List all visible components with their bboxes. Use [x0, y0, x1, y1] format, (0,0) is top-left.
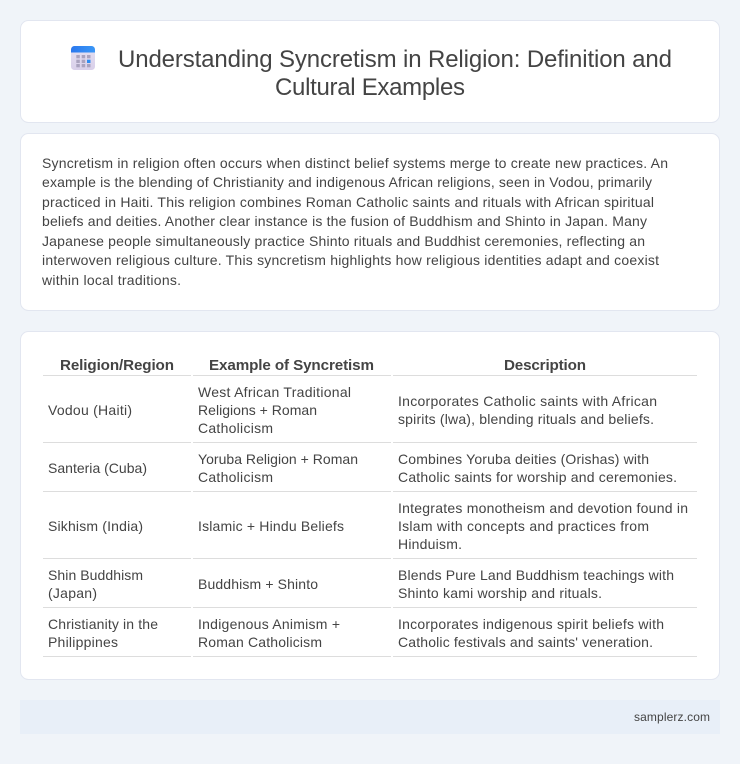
table header: [60, 357, 586, 374]
text block: syncretism overview: beliefs and deities. Another clear instance is the fusion of Buddhism and Shinto in Japan. Many: [42, 213, 647, 229]
row: Sikhism: Sikhism (India): [48, 518, 143, 534]
text block: syncretism overview: practiced in Haiti. This religion combines Roman Catholic saints and rituals with African spiritual: [42, 194, 654, 210]
row: Shin Buddhism: Shin Buddhism: [48, 567, 143, 583]
row: Vodou: Vodou (Haiti): [48, 402, 132, 418]
panel: introduction paragraph: [20, 134, 720, 310]
row: Vodou: West African Traditional: [198, 384, 351, 400]
text block: syncretism overview: example is the blending of Christianity and indigenous African religions, seen in Vodou, primarily: [42, 174, 652, 190]
panel: title card: [20, 20, 720, 122]
footer: samplerz.com: [634, 710, 710, 724]
row: Santeria: Catholicism: [198, 469, 273, 485]
row: Vodou: Religions + Roman: [198, 402, 317, 418]
title: Understanding Syncretism in Religion: Definition and: [118, 46, 672, 73]
row: Christianity in the Philippines: [43, 607, 697, 657]
row: Christianity in the Philippines: Incorporates indigenous spirit beliefs with: [398, 616, 664, 632]
table header: Religion/Region: [60, 357, 174, 374]
row: Sikhism: Integrates monotheism and devotion found in: [398, 500, 688, 516]
text block: syncretism overview: Japanese people simultaneously practice Shinto rituals and Buddhist ceremonies, reflecting an: [42, 233, 645, 249]
row: Christianity in the Philippines: Philippines: [48, 634, 118, 650]
row: Sikhism: Hinduism.: [398, 536, 462, 552]
row: Shin Buddhism: (Japan): [48, 585, 97, 601]
text block: syncretism overview: [41, 155, 668, 288]
row: Santeria: Combines Yoruba deities (Orishas) with: [398, 451, 649, 467]
footer: [20, 700, 720, 734]
table header: Example of Syncretism: [209, 357, 374, 374]
table header: Description: [504, 357, 586, 374]
row: Santeria: Yoruba Religion + Roman: [198, 451, 358, 467]
text block: syncretism overview: interwoven religious culture. This syncretism highlights how religious identities adapt and coexist: [42, 252, 659, 268]
title: Cultural Examples: [275, 74, 465, 101]
row: Shin Buddhism: [43, 558, 697, 601]
row: Christianity in the Philippines: Indigenous Animism +: [198, 616, 340, 632]
row: Santeria: Santeria (Cuba): [48, 460, 147, 476]
row: Christianity in the Philippines: Catholic festivals and saints' veneration.: [398, 634, 653, 650]
icon: calendar: [71, 46, 95, 70]
row: Vodou: spirits (lwa), blending rituals and beliefs.: [398, 411, 654, 427]
row: Shin Buddhism: Blends Pure Land Buddhism teachings with: [398, 567, 674, 583]
row: Sikhism: Islam with concepts and practices from: [398, 518, 649, 534]
text block: syncretism overview: within local traditions.: [41, 272, 181, 288]
row: Vodou: [43, 375, 697, 436]
panel: syncretism table: [20, 332, 720, 680]
row: Vodou: Catholicism: [198, 420, 273, 436]
row: Christianity in the Philippines: Christianity in the: [48, 616, 158, 632]
row: Sikhism: [43, 491, 697, 552]
row: Shin Buddhism: Buddhism + Shinto: [198, 576, 318, 592]
row: Santeria: [43, 442, 697, 485]
row: Sikhism: Islamic + Hindu Beliefs: [198, 518, 344, 534]
text block: syncretism overview: Syncretism in religion often occurs when distinct belief systems merge to create new practices. An: [42, 155, 668, 171]
row: Vodou: Incorporates Catholic saints with African: [398, 393, 657, 409]
row: Christianity in the Philippines: Roman Catholicism: [198, 634, 322, 650]
row: Shin Buddhism: Shinto kami worship and rituals.: [398, 585, 602, 601]
title: [118, 46, 672, 101]
row: Santeria: Catholic saints for worship and ceremonies.: [398, 469, 677, 485]
